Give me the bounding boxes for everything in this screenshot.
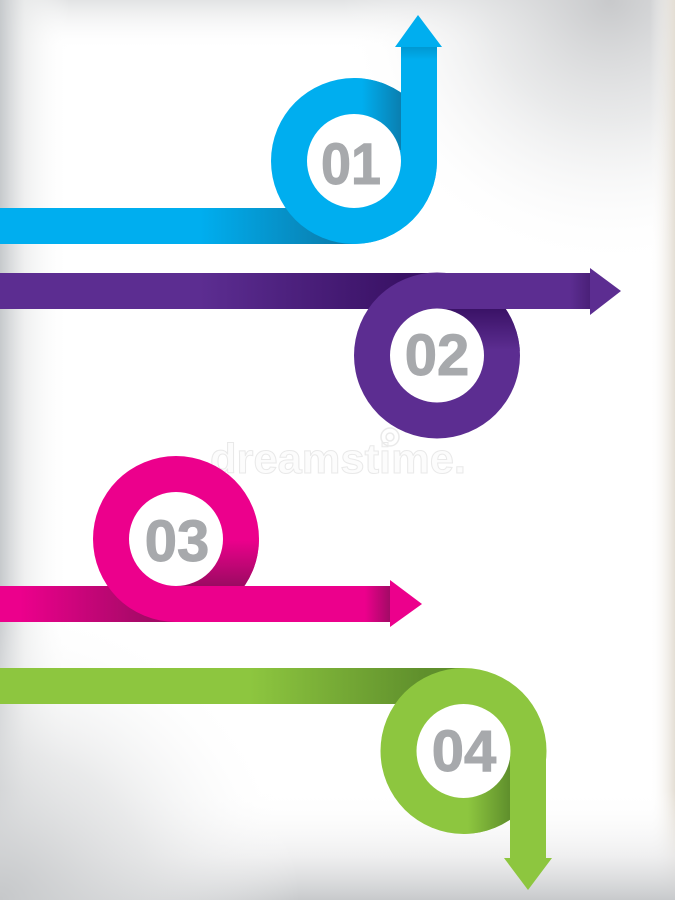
- magenta number circle: [129, 492, 223, 586]
- blue shaft shadow: [401, 47, 437, 61]
- number 01: 01: [321, 132, 381, 197]
- magenta arrow shaft: [176, 586, 390, 622]
- green tail: [0, 668, 463, 704]
- magenta shaft shadow: [365, 586, 390, 622]
- magenta arrow head: [390, 580, 422, 627]
- number 04: 04: [432, 719, 496, 784]
- purple ring: [354, 272, 520, 438]
- blue ring: [271, 78, 437, 244]
- purple number circle: [390, 308, 484, 402]
- purple tail: [0, 273, 437, 309]
- magenta tail: [0, 586, 176, 622]
- purple ring shadow: [444, 309, 520, 351]
- ribbon 02: purple: [0, 268, 621, 438]
- blue ring shadow: [354, 78, 401, 150]
- purple arrow head: [590, 268, 621, 315]
- green number circle: [416, 704, 510, 798]
- blue number circle: [307, 114, 401, 208]
- ribbon 01: blue: [0, 15, 442, 244]
- blue tail: [0, 208, 354, 244]
- watermark: dreamstime.: [210, 435, 466, 482]
- green arrow head: [504, 858, 552, 890]
- green ring: [380, 668, 546, 834]
- magenta ring shadow: [177, 540, 259, 586]
- purple shaft shadow: [570, 273, 590, 309]
- ribbon 03: magenta: [0, 456, 422, 627]
- purple arrow shaft: [437, 273, 590, 309]
- green arrow shaft: [510, 751, 546, 858]
- blue arrow shaft: [354, 47, 437, 244]
- blue arrow head: [395, 15, 442, 47]
- magenta ring: [93, 456, 259, 622]
- green ring shadow: [464, 760, 510, 834]
- number 02: 02: [405, 323, 469, 388]
- ribbon 04: green: [0, 668, 552, 890]
- number 03: 03: [145, 509, 209, 574]
